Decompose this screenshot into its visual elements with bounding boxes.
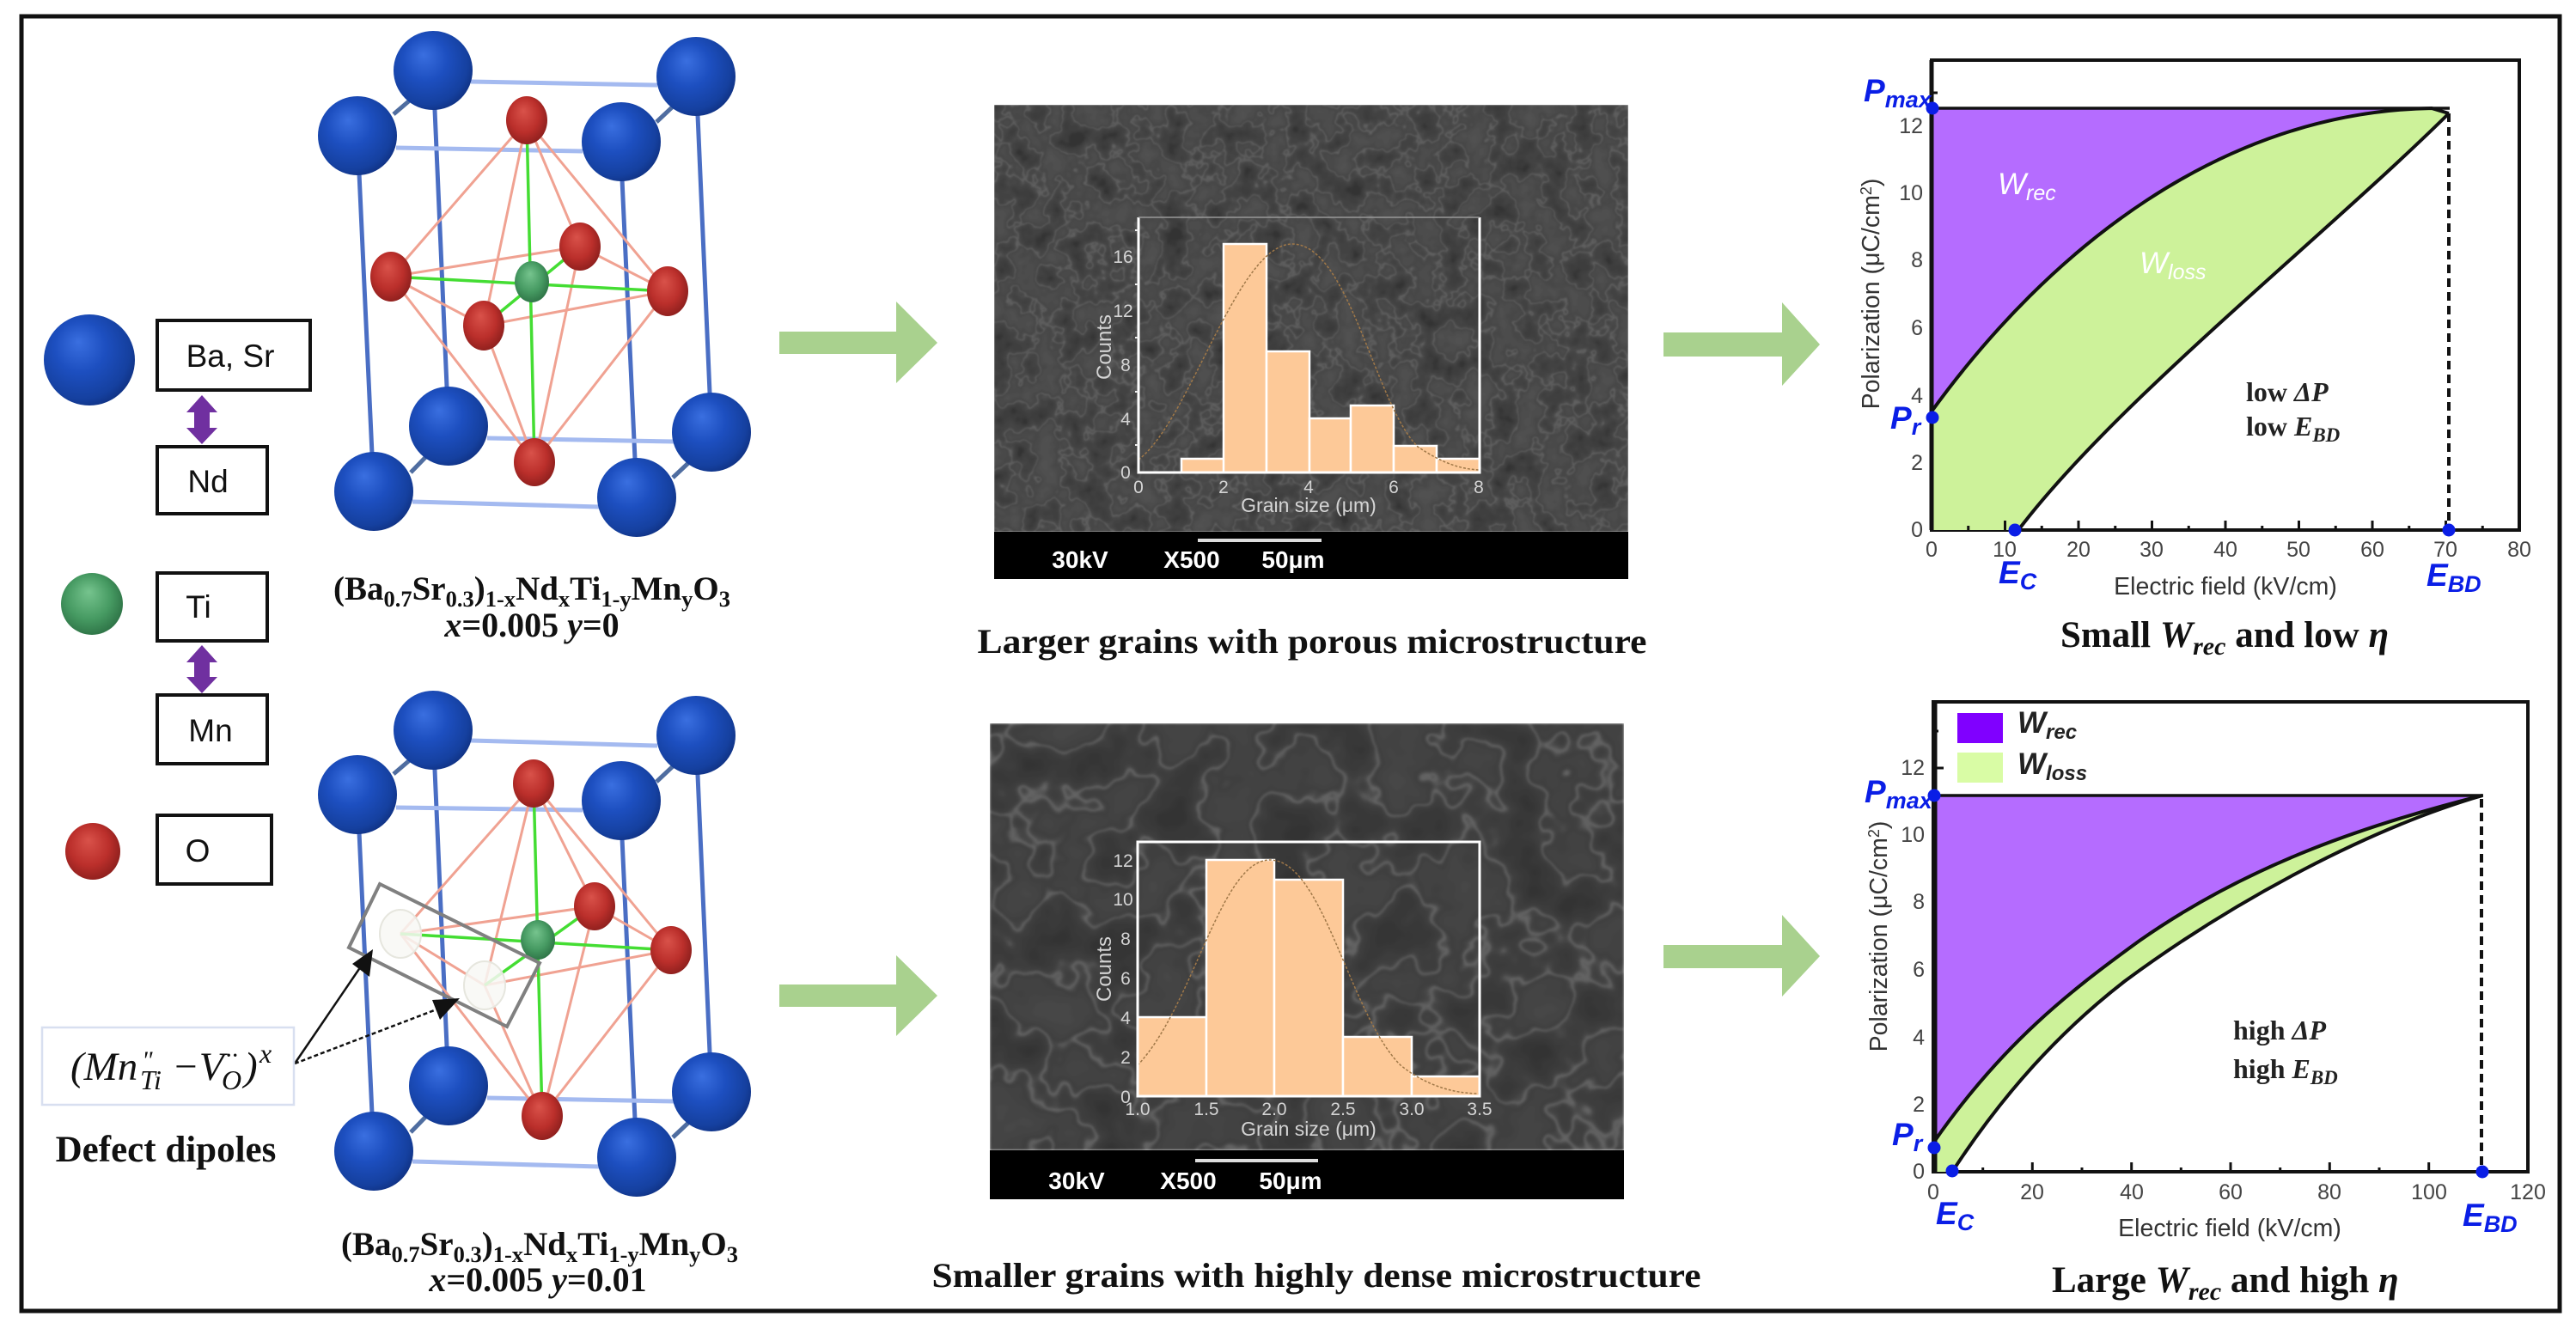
box: O: O bbox=[186, 833, 210, 869]
chart: P-E loop top: BD bbox=[2311, 424, 2341, 446]
chart: P-E loop top: Polarization (μC/cm bbox=[1858, 195, 1885, 409]
histogram: grain size bottom: 2 bbox=[1120, 1048, 1131, 1068]
chart: P-E loop bottom: 2 bbox=[1865, 829, 1883, 838]
histogram: grain size top: 8 bbox=[1474, 478, 1484, 497]
histogram: grain size bottom bbox=[1093, 842, 1492, 1140]
crystal structure: top (x=0.005 y=0) bbox=[318, 31, 751, 537]
formula: top composition: ) bbox=[474, 570, 485, 607]
icon: blue sphere bbox=[44, 314, 135, 405]
chart: P-E loop bottom: 2 bbox=[1913, 1093, 1925, 1117]
formula: top composition: y bbox=[681, 586, 693, 612]
histogram: grain size bottom: 2.0 bbox=[1261, 1100, 1287, 1119]
chart: P-E loop bottom: max bbox=[1886, 788, 1933, 814]
chart: P-E loop top: 8 bbox=[1911, 248, 1923, 272]
callout: defect dipole formula: O bbox=[222, 1064, 241, 1095]
chart: P-E loop top bbox=[1858, 60, 2531, 600]
area: W_loss bbox=[1932, 108, 2449, 530]
callout: defect dipole formula: ·· bbox=[225, 1041, 238, 1070]
chart: P-E loop bottom: 8 bbox=[1913, 890, 1925, 914]
histogram: grain size top: Grain size (μm) bbox=[1241, 494, 1377, 516]
chart: P-E loop bottom: E bbox=[1936, 1196, 1957, 1231]
box: Nd: Nd bbox=[187, 464, 229, 499]
formula: top composition: 0.7 bbox=[383, 586, 412, 612]
box: Ti bbox=[157, 573, 267, 641]
caption: large Wrec: η bbox=[2378, 1260, 2399, 1301]
legend: energy areas: W bbox=[2017, 747, 2046, 781]
chart: P-E loop top: Electric field (kV/cm) bbox=[2114, 573, 2337, 600]
formula: bottom composition: 0.3 bbox=[454, 1241, 482, 1267]
chart: P-E loop top: 50 bbox=[2286, 538, 2310, 562]
formula: top composition: 0.3 bbox=[446, 586, 474, 612]
panel: SEM image top bbox=[994, 105, 1628, 579]
formula: bottom composition: Ti bbox=[577, 1226, 608, 1263]
chart: P-E loop bottom: 100 bbox=[2411, 1180, 2447, 1204]
chart: P-E loop top: 0 bbox=[1911, 518, 1923, 542]
formula: bottom composition bbox=[341, 1226, 738, 1299]
chart: P-E loop bottom: 10 bbox=[1901, 823, 1925, 847]
arrows: defect dipole pointers bbox=[295, 949, 460, 1064]
chart: P-E loop bottom: 20 bbox=[2020, 1180, 2044, 1204]
chart: P-E loop top: loss bbox=[2168, 260, 2207, 284]
formula: top composition: 3 bbox=[719, 586, 730, 612]
chart: P-E loop top: 40 bbox=[2213, 538, 2237, 562]
chart: P-E loop top: 60 bbox=[2360, 538, 2384, 562]
arrow: top structure to microstructure bbox=[779, 302, 937, 383]
chart: P-E loop bottom: 6 bbox=[1913, 958, 1925, 982]
area: W_rec bbox=[1934, 796, 2482, 1142]
chart: P-E loop top: P bbox=[1864, 73, 1885, 108]
formula: bottom composition: 0.7 bbox=[391, 1241, 420, 1267]
formula: bottom composition: 3 bbox=[727, 1241, 738, 1267]
formula: bottom composition: Nd bbox=[523, 1226, 566, 1263]
chart: P-E loop bottom: P bbox=[1892, 1117, 1914, 1152]
histogram: grain size top: 12 bbox=[1113, 302, 1133, 321]
formula: top composition: 1-x bbox=[485, 586, 516, 612]
chart: P-E loop bottom: 0 bbox=[1927, 1180, 1939, 1204]
formula: bottom composition: x=0.005 y=0.01 bbox=[428, 1260, 647, 1299]
formula: bottom composition: 1-y bbox=[608, 1241, 639, 1267]
SEM info bar: 50μm bbox=[1261, 546, 1325, 573]
chart: P-E loop top: rec bbox=[2026, 181, 2056, 205]
legend: energy areas: W bbox=[2017, 706, 2046, 740]
chart: P-E loop bottom: E bbox=[2463, 1198, 2484, 1233]
histogram: grain size bottom: 6 bbox=[1120, 969, 1131, 989]
arrow: Ba/Sr to Nd substitution bbox=[186, 395, 217, 444]
box: Ti: Ti bbox=[186, 589, 211, 625]
chart: P-E loop bottom: 80 bbox=[2317, 1180, 2341, 1204]
formula: top composition: (Ba bbox=[333, 570, 383, 607]
arrow: bottom microstructure to P-E loop bbox=[1663, 915, 1820, 997]
callout: defect dipole formula: x bbox=[259, 1038, 272, 1069]
chart: P-E loop top: E bbox=[1999, 555, 2020, 590]
formula: bottom composition: O bbox=[700, 1226, 727, 1263]
formula: bottom composition: y bbox=[689, 1241, 700, 1267]
chart: P-E loop bottom: 60 bbox=[2219, 1180, 2243, 1204]
histogram: grain size top: 6 bbox=[1389, 478, 1399, 497]
histogram: grain size bottom: 1.0 bbox=[1125, 1100, 1151, 1119]
box: Ba, Sr: Ba, Sr bbox=[186, 338, 274, 374]
chart: P-E loop top: W bbox=[1998, 168, 2026, 201]
chart: P-E loop top: 2 bbox=[1911, 451, 1923, 475]
caption: small Wrec: η bbox=[2369, 615, 2389, 655]
histogram: grain size bottom: 0 bbox=[1120, 1088, 1131, 1107]
histogram: grain size top: 4 bbox=[1303, 478, 1314, 497]
caption: small Wrec: Small W bbox=[2060, 615, 2193, 655]
formula: top composition: O bbox=[693, 570, 719, 607]
box: Nd bbox=[157, 447, 267, 514]
formula: top composition: Nd bbox=[516, 570, 559, 607]
chart: P-E loop top: 4 bbox=[1911, 384, 1923, 408]
chart: P-E loop top: max bbox=[1885, 87, 1932, 113]
arrow: top microstructure to P-E loop bbox=[1663, 302, 1820, 386]
chart: P-E loop bottom: 120 bbox=[2510, 1180, 2546, 1204]
arrow: Ti to Mn substitution bbox=[186, 645, 217, 693]
histogram: grain size bottom: 3.0 bbox=[1399, 1100, 1425, 1119]
chart: P-E loop top: 70 bbox=[2433, 538, 2457, 562]
chart: P-E loop bottom: ) bbox=[1865, 821, 1893, 829]
formula: top composition bbox=[333, 570, 730, 644]
chart: P-E loop top: ) bbox=[1858, 179, 1885, 186]
callout: defect dipole formula: −V bbox=[172, 1045, 229, 1089]
histogram: grain size bottom: Grain size (μm) bbox=[1241, 1118, 1377, 1140]
callout: defect dipole formula: Ti bbox=[140, 1064, 162, 1095]
SEM info bar: X500 bbox=[1163, 546, 1220, 573]
histogram: grain size top: 0 bbox=[1120, 463, 1131, 483]
histogram: grain size bottom: 1.5 bbox=[1193, 1100, 1219, 1119]
arrow: bottom structure to microstructure bbox=[779, 955, 937, 1036]
histogram: grain size bottom: 3.5 bbox=[1467, 1100, 1492, 1119]
formula: bottom composition: Mn bbox=[639, 1226, 689, 1263]
chart: P-E loop top: 10 bbox=[1993, 538, 2017, 562]
chart: P-E loop top: 30 bbox=[2140, 538, 2164, 562]
chart: P-E loop top: 0 bbox=[1926, 538, 1938, 562]
area: W_rec bbox=[1932, 108, 2432, 411]
crystal structure: bottom (x=0.005 y=0.01) bbox=[318, 691, 751, 1197]
chart: P-E loop bottom: Electric field (kV/cm) bbox=[2118, 1215, 2341, 1242]
chart: P-E loop bottom: 12 bbox=[1901, 756, 1925, 780]
chart: P-E loop top: 20 bbox=[2066, 538, 2091, 562]
caption: large Wrec: and high bbox=[2221, 1260, 2378, 1301]
histogram: grain size top: 0 bbox=[1133, 478, 1144, 497]
chart: P-E loop bottom: high E bbox=[2233, 1053, 2310, 1084]
chart: P-E loop bottom: 4 bbox=[1913, 1026, 1925, 1050]
box: Ba, Sr bbox=[157, 320, 310, 390]
histogram: grain size bottom: 12 bbox=[1113, 851, 1133, 871]
chart: P-E loop bottom: BD bbox=[2484, 1211, 2518, 1237]
chart: P-E loop bottom: high ΔP bbox=[2233, 1015, 2327, 1045]
formula: top composition: Mn bbox=[632, 570, 681, 607]
chart: P-E loop top: 2 bbox=[1858, 186, 1875, 195]
chart: P-E loop bottom: C bbox=[1957, 1210, 1975, 1235]
formula: bottom composition: (Ba bbox=[341, 1226, 391, 1263]
histogram: grain size top: Counts bbox=[1093, 314, 1116, 380]
chart: P-E loop top: low ΔP bbox=[2246, 376, 2329, 407]
legend: atom species bbox=[44, 314, 310, 884]
callout: defect dipole formula: " bbox=[142, 1046, 153, 1075]
caption: large Wrec: rec bbox=[2188, 1277, 2221, 1306]
chart: P-E loop top: low E bbox=[2246, 411, 2312, 442]
callout: defect dipole formula: (Mn bbox=[70, 1045, 137, 1089]
chart: P-E loop bottom: BD bbox=[2310, 1067, 2338, 1088]
histogram: grain size bottom: 8 bbox=[1120, 930, 1131, 949]
defect dipole highlight box bbox=[349, 884, 540, 1027]
caption: small Wrec: and low bbox=[2225, 615, 2369, 655]
SEM info bar bbox=[990, 1150, 1624, 1199]
histogram: grain size bottom: Counts bbox=[1093, 936, 1116, 1002]
box: O bbox=[157, 815, 272, 884]
caption: large Wrec: Large W bbox=[2052, 1260, 2188, 1301]
histogram: grain size top: 4 bbox=[1120, 410, 1131, 430]
histogram: grain size top: 2 bbox=[1218, 478, 1229, 497]
formula: bottom composition: ) bbox=[482, 1226, 493, 1263]
formula: bottom composition: Sr bbox=[420, 1226, 454, 1263]
chart: P-E loop top: 6 bbox=[1911, 316, 1923, 340]
formula: top composition: Sr bbox=[412, 570, 446, 607]
chart: P-E loop top: 10 bbox=[1899, 181, 1923, 205]
chart: P-E loop top: 12 bbox=[1899, 114, 1923, 138]
legend: energy areas: loss bbox=[2046, 762, 2087, 785]
formula: top composition: Ti bbox=[570, 570, 601, 607]
SEM info bar: 50μm bbox=[1259, 1167, 1322, 1194]
icon: red sphere bbox=[65, 823, 120, 880]
callout: defect dipole formula bbox=[42, 1027, 294, 1105]
chart: P-E loop top: C bbox=[2020, 569, 2037, 594]
caption: smaller grains: Smaller grains with highly dense microstructure bbox=[931, 1256, 1701, 1295]
chart: P-E loop top: E bbox=[2426, 558, 2448, 593]
panel: SEM image bottom bbox=[990, 723, 1624, 1199]
callout: defect dipole formula: ) bbox=[241, 1045, 258, 1089]
chart: P-E loop top: P bbox=[1890, 400, 1912, 436]
histogram: grain size top: 16 bbox=[1113, 247, 1133, 267]
chart: P-E loop bottom: Polarization (μC/cm bbox=[1865, 838, 1893, 1052]
SEM info bar bbox=[994, 532, 1628, 579]
caption: small Wrec: rec bbox=[2193, 632, 2225, 661]
SEM info bar: 30kV bbox=[1052, 546, 1108, 573]
box: Mn bbox=[157, 695, 267, 764]
area: W_loss bbox=[1934, 796, 2482, 1172]
formula: top composition: 1-y bbox=[601, 586, 632, 612]
legend: energy areas bbox=[1957, 706, 2087, 785]
box: Mn: Mn bbox=[188, 713, 233, 748]
histogram: grain size bottom: 10 bbox=[1113, 890, 1133, 910]
chart: P-E loop top: W bbox=[2140, 247, 2168, 280]
chart: P-E loop bottom: r bbox=[1914, 1131, 1924, 1156]
formula: top composition: x=0.005 y=0 bbox=[443, 606, 620, 644]
chart: P-E loop top: 80 bbox=[2507, 538, 2531, 562]
chart: P-E loop bottom: P bbox=[1865, 774, 1886, 809]
formula: bottom composition: 1-x bbox=[493, 1241, 524, 1267]
histogram: grain size bottom: 2.5 bbox=[1330, 1100, 1356, 1119]
formula: bottom composition: x bbox=[566, 1241, 578, 1267]
histogram: grain size bottom: 4 bbox=[1120, 1009, 1131, 1028]
chart: P-E loop top: r bbox=[1912, 414, 1922, 440]
formula: top composition: x bbox=[559, 586, 571, 612]
text: defect dipoles: Defect dipoles bbox=[56, 1130, 276, 1170]
legend: energy areas: rec bbox=[2046, 721, 2077, 744]
chart: P-E loop bottom: 40 bbox=[2120, 1180, 2144, 1204]
icon: green sphere bbox=[61, 573, 123, 635]
caption: larger grains: Larger grains with porous microstructure bbox=[978, 622, 1646, 661]
SEM info bar: 30kV bbox=[1048, 1167, 1105, 1194]
chart: P-E loop bottom: 0 bbox=[1913, 1160, 1925, 1184]
histogram: grain size top bbox=[1093, 217, 1484, 516]
SEM info bar: X500 bbox=[1160, 1167, 1217, 1194]
chart: P-E loop bottom bbox=[1865, 702, 2546, 1242]
histogram: grain size top: 8 bbox=[1120, 356, 1131, 375]
chart: P-E loop top: BD bbox=[2448, 571, 2481, 597]
